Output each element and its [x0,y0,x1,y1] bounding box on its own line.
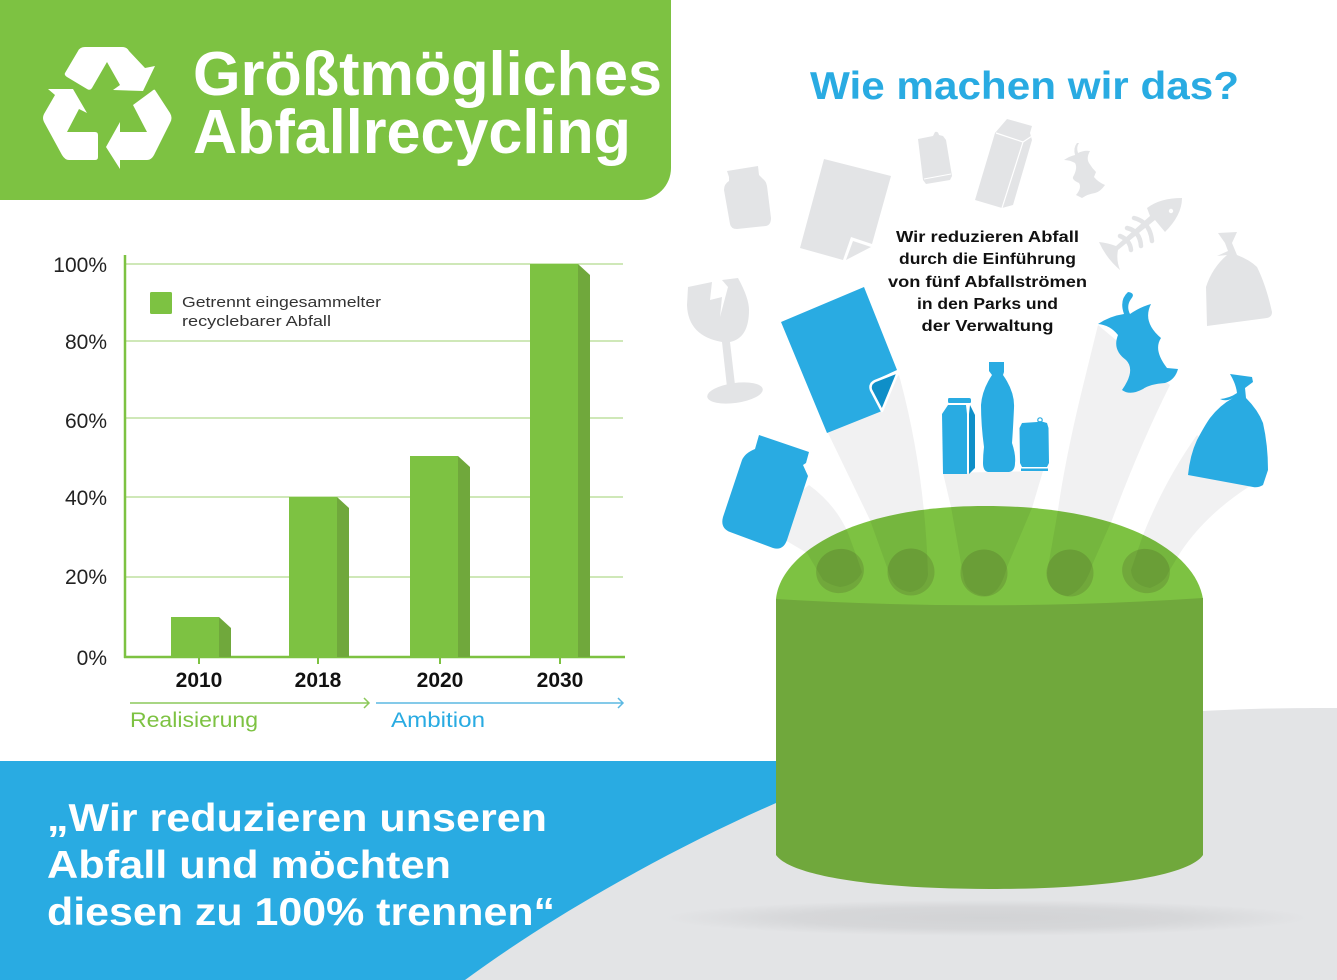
quote [47,797,555,934]
grey waste icons [687,119,1272,407]
text: description: der Verwaltung [922,318,1054,335]
bin shadow [665,900,1309,936]
y axis labels: 0% [77,647,107,670]
text: description: Wir reduzieren Abfall [896,229,1079,246]
arrow: Ambition [376,698,623,708]
text: description: von fünf Abfallströmen [888,274,1087,291]
y axis labels: 80% [65,331,107,354]
bar chart [53,254,625,692]
y axis labels [53,254,107,670]
icon: broken wine glass [687,278,764,407]
bar 2010 [171,617,231,657]
x axis labels: 2018 [295,669,342,692]
y axis labels: 100% [53,254,107,277]
text: description: in den Parks und [917,296,1058,313]
icon: grey jar [724,166,771,229]
icon: grey can [918,132,952,184]
quote: diesen zu 100% trennen“ [47,891,555,934]
icon: grey paper [800,159,891,260]
y axis labels: 60% [65,410,107,433]
quote: „Wir reduzieren unseren [47,797,547,840]
x axis labels [176,669,583,692]
text: description: durch die Einführung [899,251,1076,268]
icon: green bin [776,506,1203,889]
label: Realisierung: Realisierung [130,709,258,732]
panel: title banner [0,0,671,200]
icon: grey apple core [1064,143,1105,198]
icon: blue bottle [981,362,1015,472]
icon: blue jar [722,435,809,549]
grey floor hill [465,708,1337,980]
light beams [785,325,1250,596]
legend: Getrennt eingesammelter [182,294,381,311]
title: Größtmögliches [193,40,662,109]
bar 2020 [410,456,470,657]
x axis labels: 2020 [417,669,463,692]
label: Ambition: Ambition [391,709,485,732]
blue waste icons [722,287,1268,549]
y axis labels: 40% [65,487,107,510]
legend [150,292,381,330]
text: description [888,229,1087,335]
title [193,40,662,167]
icon: blue paper [781,287,898,433]
icon: blue garbage bag [1188,374,1268,487]
legend: recyclebarer Abfall [182,313,331,330]
icon: blue can [1020,418,1049,471]
beam overlays on bin lid [806,506,1178,596]
icon: grey fish bone [1099,198,1182,270]
bin openings [811,544,1175,598]
icon: recycling symbol [43,47,172,169]
x axis labels: 2030 [537,669,583,692]
title: Abfallrecycling [193,98,631,167]
icon: grey garbage bag [1206,232,1272,326]
icon: blue apple core [1098,292,1178,393]
bar 2018 [289,497,349,657]
heading: Wie machen wir das?: Wie machen wir das? [810,65,1239,108]
bar 2030 [530,264,590,657]
y axis labels: 20% [65,566,107,589]
quote: Abfall und möchten [47,844,451,887]
arrow: Realisierung [130,698,369,708]
icon: grey carton [975,119,1032,208]
icon: blue carton [942,398,975,474]
x axis labels: 2010 [176,669,222,692]
panel: quote background [0,761,800,980]
